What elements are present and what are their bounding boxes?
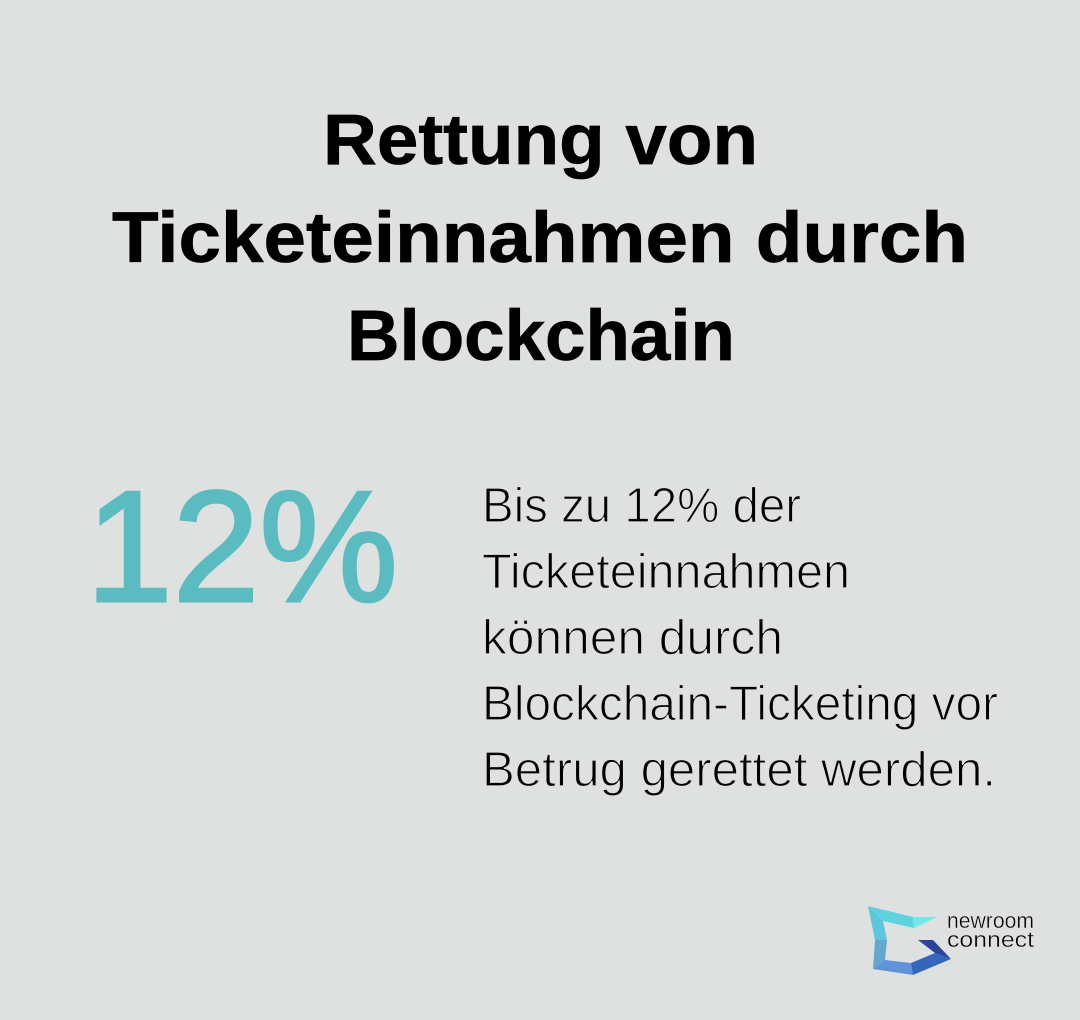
description text: können durch	[482, 611, 783, 665]
title: Rettung von	[323, 101, 758, 180]
description text	[482, 479, 998, 797]
logo: newroom connect	[868, 906, 1034, 975]
description text: Bis zu 12% der	[482, 479, 801, 533]
title: Ticketeinnahmen durch	[112, 199, 968, 278]
icon: logo mark	[868, 906, 951, 975]
title: Blockchain	[347, 297, 735, 376]
title	[112, 101, 968, 376]
logo wordmark: connect	[947, 927, 1034, 952]
logo wordmark	[947, 908, 1034, 952]
big statistic: 12%: 12%	[86, 459, 398, 635]
description text: Ticketeinnahmen	[482, 545, 850, 599]
logo wordmark: newroom	[947, 908, 1034, 933]
description text: Betrug gerettet werden.	[482, 743, 996, 797]
description text: Blockchain-Ticketing vor	[482, 677, 998, 731]
